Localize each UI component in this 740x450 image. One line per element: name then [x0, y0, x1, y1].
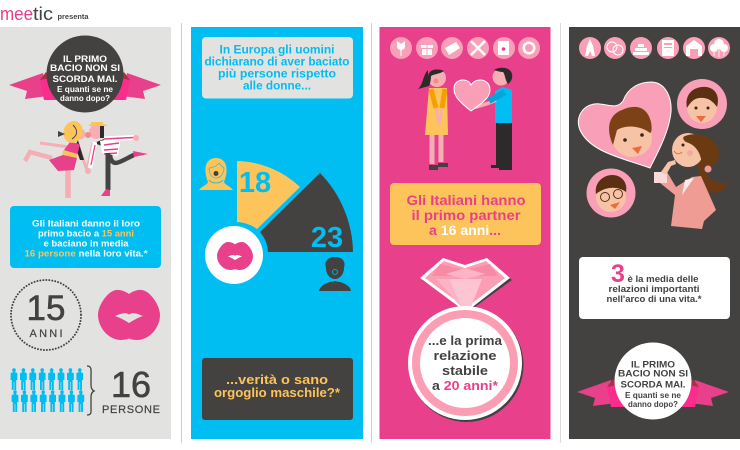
badge: il primo bacio closing: [577, 342, 729, 420]
callout: three relationships: è la media delle: [628, 274, 698, 284]
chart: kisses by gender: 23: [311, 222, 343, 254]
badge: il primo bacio: danno dopo?: [60, 94, 110, 103]
logo: meetic presenta: [0, 4, 89, 24]
panel: first partner: [380, 27, 550, 439]
callout: male pride: ...verità o sano: [226, 373, 328, 387]
illustration: face with glasses: [586, 168, 636, 218]
badge: il primo bacio closing: danno dopo?: [628, 400, 678, 409]
icon: diamond ring with text: ...e la prima: [428, 333, 503, 348]
stat: 15 anni: [11, 280, 81, 350]
badge: il primo bacio: E quanti se ne: [57, 85, 114, 94]
callout: italians first kiss: primo bacio a 15 anni: [38, 228, 134, 238]
callout: europe: [202, 37, 353, 98]
icon: lips: [98, 290, 160, 340]
panel: important relationships: [569, 27, 740, 439]
callout: first partner: [390, 183, 541, 245]
callout: three relationships: relazioni importanti: [608, 284, 700, 294]
callout: first partner: il primo partner: [412, 207, 521, 223]
chart: kisses by gender: 18: [239, 167, 271, 199]
stat: 16 persone: PERSONE: [102, 404, 160, 416]
illustration: heart with partner: [578, 82, 671, 168]
icon row: sixteen people: [11, 368, 84, 412]
icon: diamond ring with text: a 20 anni*: [432, 378, 499, 393]
badge: il primo bacio closing: SCORDA MAI.: [620, 380, 686, 390]
icon: man: [319, 257, 351, 291]
callout: italians first kiss: e baciano in media: [44, 238, 130, 248]
panel: first kiss: [0, 27, 171, 439]
logo: meetic presenta: mee: [0, 4, 33, 24]
callout: three relationships: [579, 257, 730, 319]
badge: il primo bacio closing: IL PRIMO: [631, 360, 675, 370]
badge: il primo bacio: SCORDA MAI.: [52, 74, 118, 85]
stat: 16 persone: 16: [111, 364, 151, 405]
stat: 16 persone: [102, 364, 160, 416]
icon row: relationships: [579, 37, 730, 59]
logo: meetic presenta: tic: [33, 4, 53, 24]
stat: 15 anni: ANNI: [30, 328, 62, 340]
chart: kisses by gender: [205, 161, 353, 284]
callout: first partner: Gli Italiani hanno: [406, 192, 526, 208]
icon: diamond ring with text: stabile: [442, 363, 488, 378]
illustration: couple with heart: [418, 68, 512, 170]
badge: il primo bacio closing: E quanti se ne: [625, 391, 682, 400]
callout: italians first kiss: [10, 206, 161, 268]
callout: three relationships: nell'arco di una vita.*: [606, 294, 702, 304]
callout: male pride: orgoglio maschile?*: [214, 386, 340, 400]
logo: meetic presenta: presenta: [58, 12, 89, 21]
callout: europe: dichiarano di aver baciato: [204, 56, 350, 68]
callout: male pride: [202, 358, 353, 420]
icon: woman: [199, 158, 233, 190]
callout: first partner: a 16 anni...: [429, 222, 501, 238]
illustration: face with brown hair: [677, 79, 727, 129]
icon: diamond ring with text: [408, 258, 524, 422]
badge: il primo bacio: [9, 36, 161, 112]
callout: europe: alle donne...: [243, 80, 311, 92]
icon row: dating: [390, 37, 540, 59]
badge: il primo bacio: BACIO NON SI: [50, 63, 120, 74]
badge: il primo bacio closing: BACIO NON SI: [618, 368, 688, 380]
callout: italians first kiss: 16 persone nella loro vita.*: [24, 248, 148, 258]
stat: 15 anni: 15: [27, 289, 65, 328]
callout: italians first kiss: Gli Italiani danno il loro: [32, 218, 141, 228]
callout: europe: In Europa gli uomini: [220, 44, 334, 56]
illustration: thinking woman: [654, 133, 729, 229]
badge: il primo bacio: IL PRIMO: [63, 54, 107, 65]
illustration: couple kissing: [25, 118, 148, 198]
callout: three relationships: 3: [611, 260, 625, 288]
panel: men vs women: [191, 27, 363, 439]
icon: diamond ring with text: relazione: [434, 348, 496, 363]
callout: europe: più persone rispetto: [218, 68, 336, 80]
